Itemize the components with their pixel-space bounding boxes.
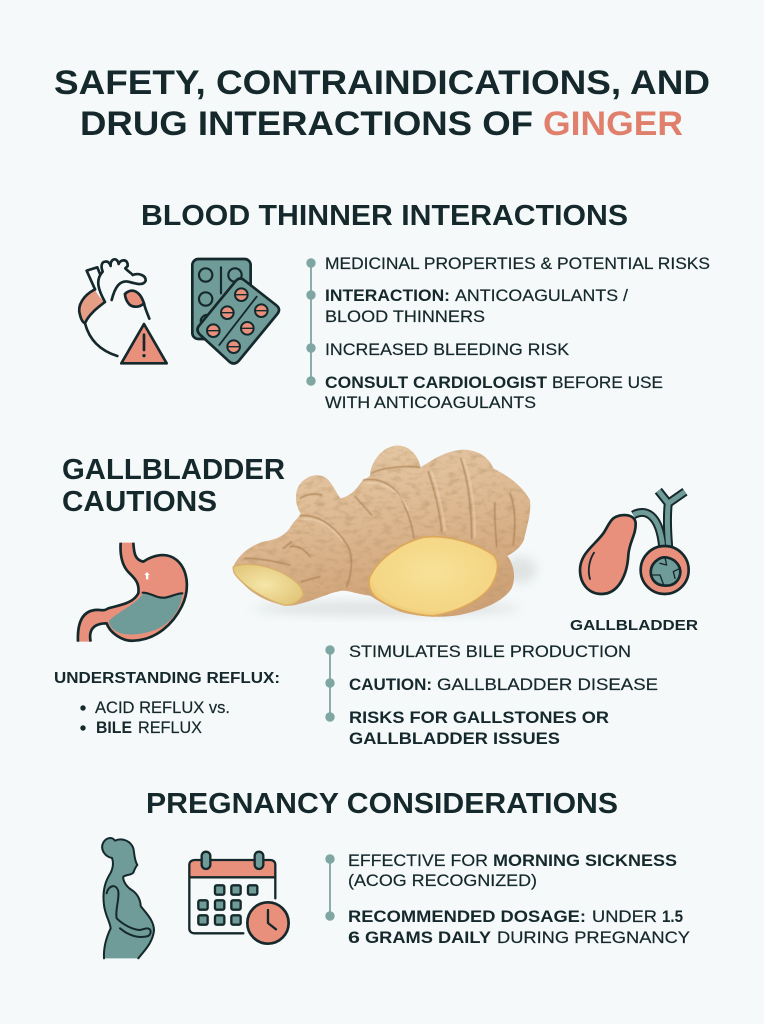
- heading: gallbladder cautions: GALLBLADDER: [62, 454, 285, 486]
- title: [54, 64, 710, 143]
- bullet list: gallbladder: [325, 642, 658, 748]
- icon: calendar with clock: [189, 852, 289, 944]
- bullet list: blood thinner: BLOOD THINNERS: [325, 307, 485, 326]
- bullet list: blood thinner: CONSULT CARDIOLOGIST: [325, 373, 548, 392]
- label: gallbladder: GALLBLADDER: [570, 617, 698, 634]
- bullet list: pregnancy: MORNING SICKNESS: [493, 851, 677, 870]
- title: SAFETY, CONTRAINDICATIONS, AND: [54, 64, 710, 102]
- icon: heart with warning triangle: [79, 259, 167, 363]
- bullet list: pregnancy: [325, 851, 690, 947]
- bullet list: gallbladder: STIMULATES BILE PRODUCTION: [349, 642, 631, 661]
- text block: understanding reflux: [54, 670, 280, 737]
- icon: pregnant woman silhouette: [102, 838, 154, 958]
- title: DRUG INTERACTIONS OF: [80, 105, 533, 143]
- bullet list: pregnancy: DURING PREGNANCY: [497, 928, 690, 947]
- bullet list: pregnancy: UNDER: [592, 907, 657, 926]
- bullet list: pregnancy: 1.5: [662, 907, 683, 926]
- bullet list: blood thinner: MEDICINAL PROPERTIES & POTENTIAL RISKS: [325, 254, 710, 273]
- bullet list: pregnancy: RECOMMENDED DOSAGE:: [348, 907, 586, 926]
- icon: stomach: [78, 543, 187, 642]
- bullet list: blood thinner: INTERACTION:: [325, 286, 450, 305]
- bullet list: pregnancy: (ACOG RECOGNIZED): [348, 871, 537, 890]
- bullet list: gallbladder: GALLBLADDER DISEASE: [437, 675, 658, 694]
- text block: understanding reflux: ACID REFLUX vs.: [95, 698, 230, 717]
- icon: gallbladder: [580, 491, 689, 594]
- text block: understanding reflux: UNDERSTANDING REFLUX:: [54, 670, 280, 687]
- text block: understanding reflux: REFLUX: [138, 718, 202, 737]
- bullet list: gallbladder: CAUTION:: [349, 675, 432, 694]
- heading: blood thinner interactions: BLOOD THINNER INTERACTIONS: [141, 200, 628, 232]
- bullet list: gallbladder: RISKS FOR GALLSTONES OR: [349, 708, 609, 727]
- bullet list: blood thinner: [306, 254, 710, 412]
- bullet list: blood thinner: BEFORE USE: [552, 373, 663, 392]
- bullet list: pregnancy: GRAMS DAILY: [365, 928, 492, 947]
- text block: understanding reflux: BILE: [96, 718, 132, 737]
- bullet list: gallbladder: GALLBLADDER ISSUES: [349, 729, 560, 748]
- ginger root photo illustration: [233, 445, 537, 617]
- bullet list: blood thinner: INCREASED BLEEDING RISK: [325, 340, 570, 359]
- title: GINGER: [543, 105, 683, 143]
- bullet list: blood thinner: ANTICOAGULANTS /: [455, 286, 628, 305]
- heading: gallbladder cautions: CAUTIONS: [62, 486, 217, 518]
- icon: blister packs: [192, 259, 279, 363]
- bullet list: blood thinner: WITH ANTICOAGULANTS: [325, 393, 536, 412]
- heading: pregnancy considerations: PREGNANCY CONSIDERATIONS: [146, 788, 618, 820]
- heading: gallbladder cautions: [62, 454, 285, 518]
- bullet list: pregnancy: EFFECTIVE FOR: [348, 851, 488, 870]
- bullet list: pregnancy: 6: [348, 928, 360, 947]
